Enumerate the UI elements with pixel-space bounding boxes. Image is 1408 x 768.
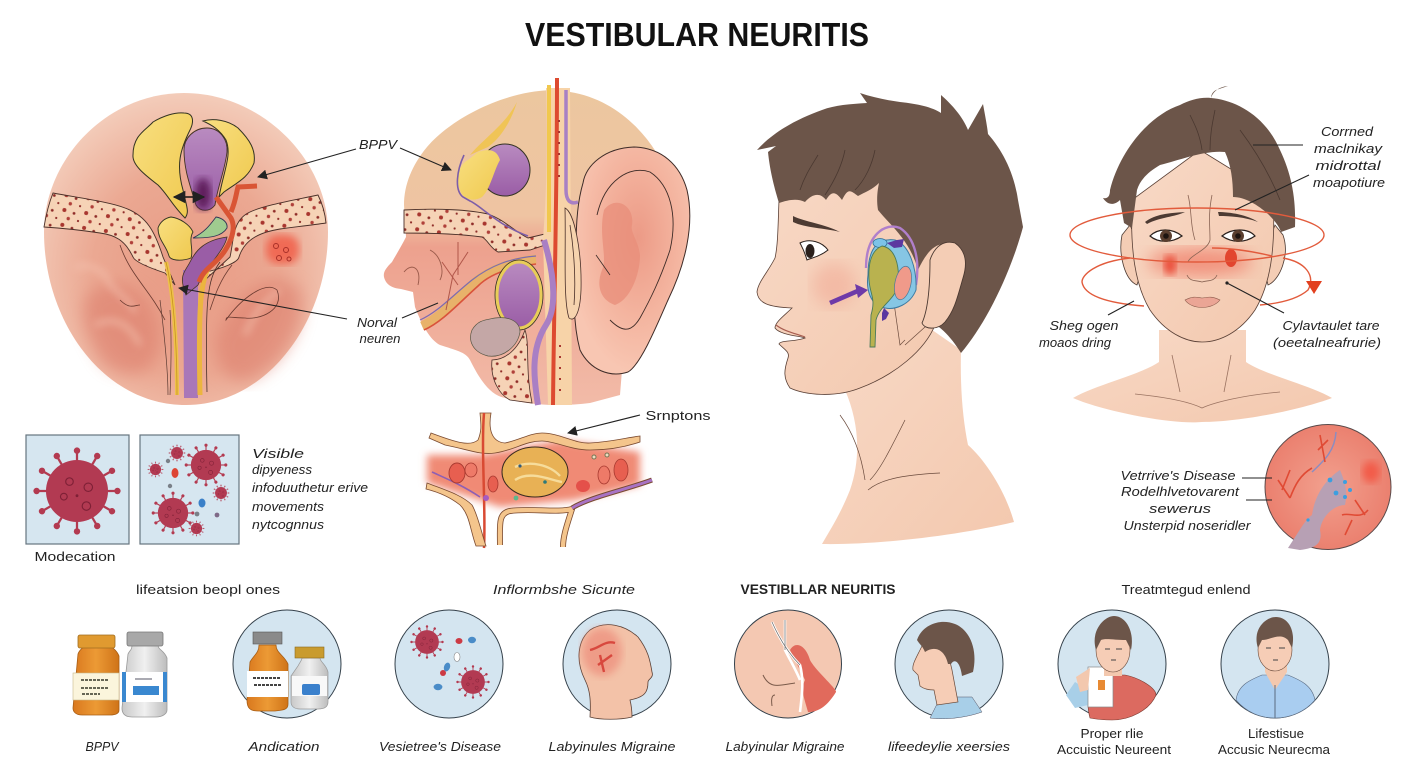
panel: frontal face with vertigo rings	[1070, 86, 1332, 422]
oral nerve bundle	[422, 259, 536, 326]
upper inner ear	[457, 102, 530, 236]
brow and eye	[793, 216, 840, 260]
callout: normal neuron	[179, 288, 438, 346]
label: Lifestisue	[1248, 726, 1304, 741]
callout: inset circle labels: Rodelhlvetovarent	[1121, 484, 1241, 499]
panel: side head cross-section	[384, 78, 690, 405]
ears	[1121, 225, 1145, 285]
label	[1057, 726, 1171, 757]
icon: head with inflammation	[563, 610, 671, 719]
callout: face lower left: moaos dring	[1039, 335, 1112, 350]
panel: virus boxes and symptoms	[26, 435, 368, 564]
label: Proper rlie	[1080, 726, 1144, 741]
canal tubes beside ear	[565, 208, 581, 319]
callout: inset circle labels: Unsterpid noseridler	[1124, 518, 1251, 533]
cheek inflammation	[1148, 248, 1252, 276]
callout: face upper right: midrottal	[1316, 158, 1382, 173]
callout: symptoms	[568, 408, 711, 433]
title: VESTIBULAR NEURITIS	[525, 16, 869, 53]
mouth	[776, 325, 805, 337]
lower bone	[492, 330, 532, 403]
callout: normal neuron: neuren	[360, 331, 400, 346]
yellow lower lobe	[158, 217, 193, 260]
callout: inset circle labels	[1120, 468, 1272, 533]
ear	[922, 242, 965, 328]
icon: viruses in circle	[395, 610, 503, 718]
mouth and nose creases	[404, 250, 442, 285]
symptom list: dipyeness	[252, 462, 313, 477]
double arrow	[174, 196, 204, 198]
yellow lobe right	[203, 120, 254, 197]
head side outline	[384, 90, 670, 405]
face	[1132, 150, 1274, 342]
yellow ganglion	[502, 447, 568, 497]
section headings	[136, 581, 1250, 597]
label: lifeedeylie xeersies	[888, 739, 1011, 754]
brain contour lines	[120, 245, 279, 320]
callout: BPPV	[258, 137, 451, 177]
jaw and clavicle lines	[840, 282, 955, 490]
symptom list: infoduuthetur erive	[252, 480, 368, 495]
purple lower canal	[182, 237, 227, 295]
label: Accuistic Neureent	[1057, 742, 1171, 757]
panel: side profile with inner ear	[757, 93, 1023, 544]
section headings: VESTIBLLAR NEURITIS	[740, 581, 896, 597]
red artery	[199, 197, 233, 282]
rotation rings	[1070, 208, 1324, 306]
cheek blush	[812, 263, 856, 307]
symptom list: nytcognnus	[252, 517, 325, 532]
label	[1218, 726, 1331, 757]
neck and shoulders	[1073, 330, 1332, 422]
icon: profile portrait	[895, 610, 1003, 719]
virus box 2	[140, 435, 239, 544]
green sac	[193, 217, 227, 238]
hair	[757, 93, 1023, 353]
label: Labyinular Migraine	[726, 739, 844, 754]
nerve branch on cheek	[442, 242, 468, 310]
caption: Modecation	[34, 549, 116, 564]
callout: inset circle labels: Vetrrive's Disease	[1120, 468, 1236, 483]
callout: BPPV: BPPV	[359, 137, 398, 152]
head outline	[44, 93, 328, 405]
yellow lobe left	[133, 113, 192, 218]
label: Vesietree's Disease	[379, 739, 501, 754]
callout: face lower right: Cylavtaulet tare	[1282, 318, 1380, 333]
callout: symptoms: Srnptons	[646, 408, 711, 423]
hair	[1103, 86, 1295, 232]
face profile	[757, 170, 950, 394]
grey mass	[471, 318, 520, 356]
panel: inflamed nerve diagram	[426, 413, 652, 548]
panel: frontal head cross-section	[44, 93, 328, 405]
section headings: lifeatsion beopl ones	[136, 582, 281, 597]
purple cyst	[497, 262, 541, 328]
label: Labyinules Migraine	[548, 739, 676, 754]
bone band left	[44, 193, 175, 285]
section headings: Inflormbshe Sicunte	[493, 582, 635, 597]
vertical vessels	[534, 78, 578, 405]
icon: person holding card	[1058, 610, 1166, 720]
callout: face lower right: (oeetalneafrurie)	[1273, 335, 1381, 350]
panel: inflamed inset circle	[1265, 424, 1391, 550]
label: Accusic Neurecma	[1218, 742, 1331, 757]
label: BPPV	[86, 739, 120, 754]
purple canal	[184, 128, 227, 210]
inflamed spot	[266, 235, 299, 264]
callout: face lower left	[1039, 301, 1134, 350]
central nerve columns	[160, 258, 220, 398]
eyes and brows	[1145, 212, 1258, 242]
nose and mouth	[1185, 195, 1220, 308]
icon: bottles in circle	[233, 610, 341, 718]
inner ear diagram	[830, 227, 917, 347]
callout: face upper right: Corrned	[1321, 124, 1374, 139]
icon: medicine bottles	[73, 632, 167, 717]
label: Andication	[247, 739, 320, 754]
ear	[574, 147, 690, 374]
virus box 1	[26, 435, 129, 544]
bone band right	[202, 195, 326, 280]
callout: inset circle labels: sewerus	[1149, 501, 1212, 516]
symptom list: Visible	[252, 446, 304, 461]
symptom list	[252, 446, 368, 532]
icon: person in blue	[1221, 610, 1329, 718]
callout: face lower right	[1225, 281, 1381, 350]
callout: face upper right	[1235, 124, 1385, 210]
bone band	[404, 209, 560, 252]
callout: face upper right: moapotiure	[1313, 175, 1385, 190]
icon: ear nerve in circle	[734, 610, 842, 718]
callout: normal neuron: Norval	[357, 315, 398, 330]
symptom list: movements	[252, 499, 325, 514]
callout: face lower left: Sheg ogen	[1050, 318, 1118, 333]
callout: face upper right: maclnikay	[1314, 141, 1384, 156]
neck and shoulder	[822, 325, 1014, 544]
section headings: Treatmtegud enlend	[1122, 582, 1250, 597]
